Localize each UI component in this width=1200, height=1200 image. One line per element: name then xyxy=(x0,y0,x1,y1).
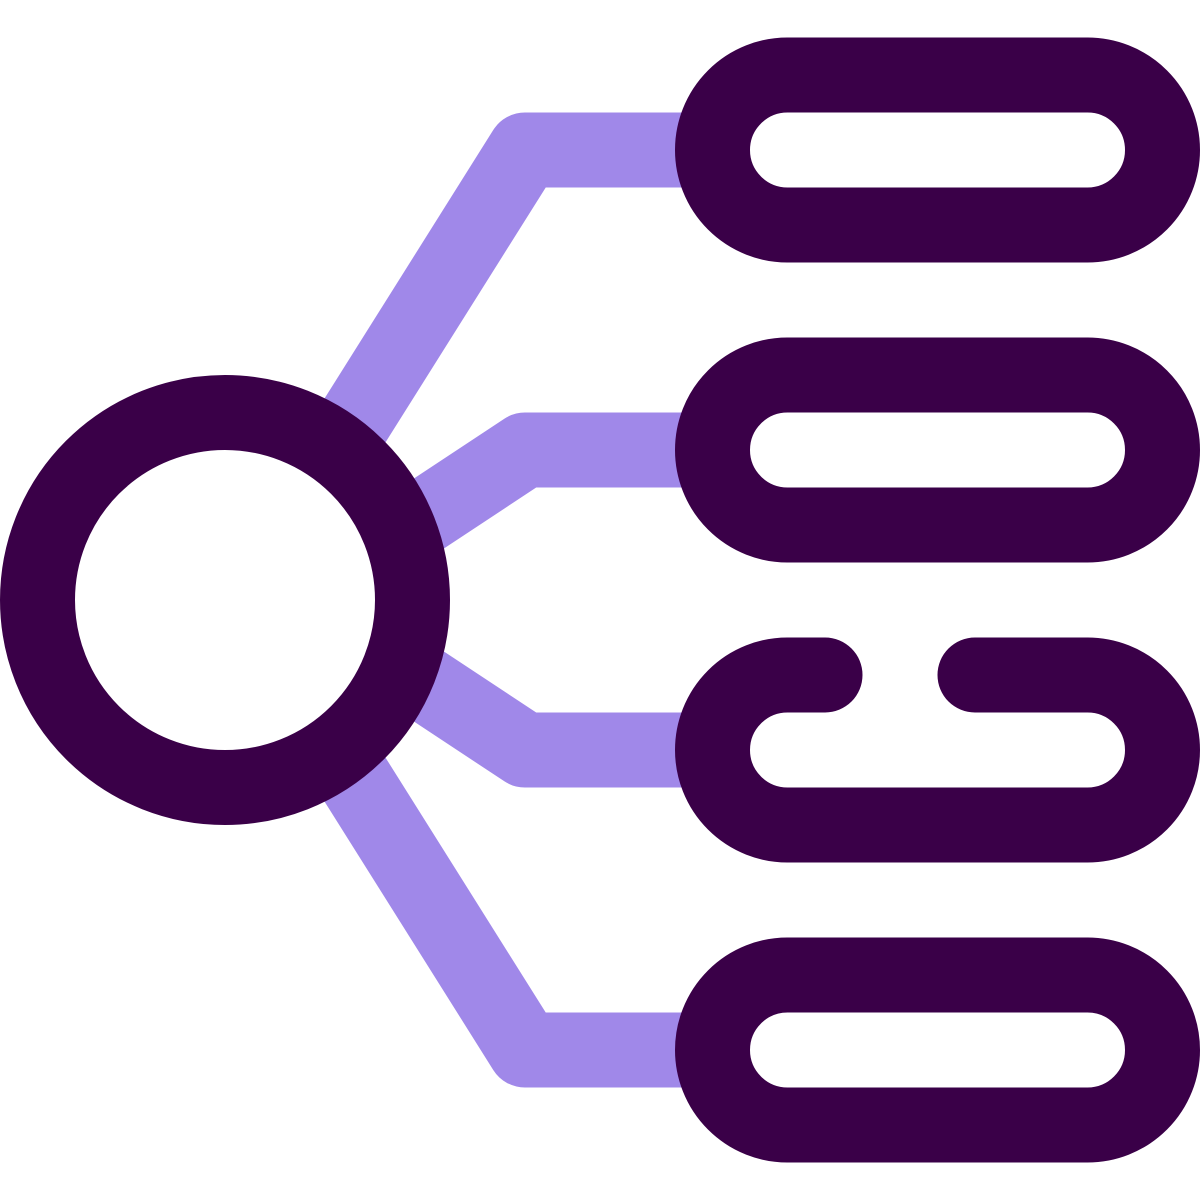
node 3 (open) xyxy=(712,675,1162,825)
connector lines xyxy=(349,150,710,1050)
connector: upper middle xyxy=(410,450,710,526)
node 2 xyxy=(712,375,1162,525)
node 1 xyxy=(712,75,1162,225)
connector: lower middle xyxy=(410,674,710,750)
connector: bottom xyxy=(349,770,710,1050)
node 4 xyxy=(712,975,1162,1125)
connector: top xyxy=(349,150,710,430)
root circle xyxy=(38,412,412,788)
node boxes xyxy=(712,75,1162,1125)
